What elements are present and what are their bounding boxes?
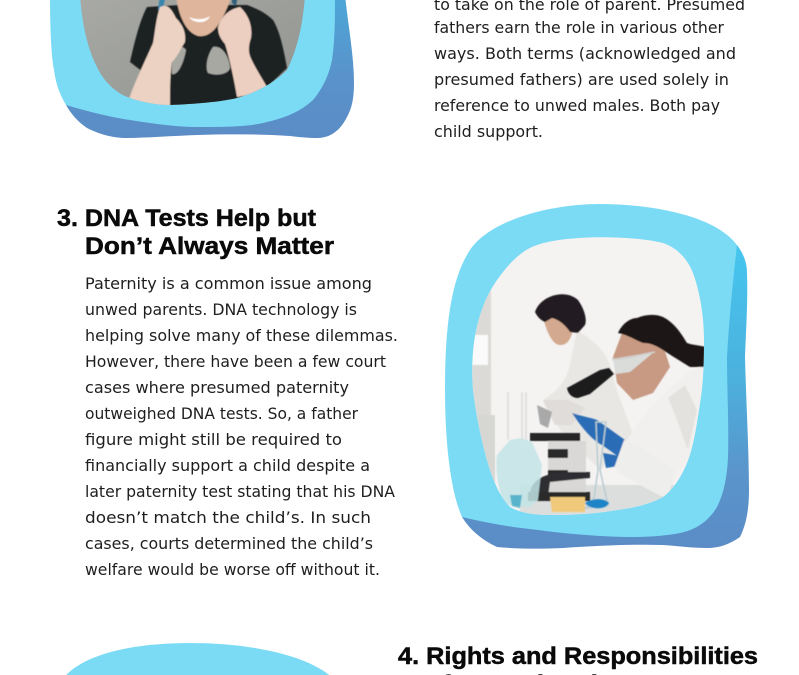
text block: DNA tests: welfare would be worse off without it.: [85, 560, 380, 579]
back scientist: [535, 294, 633, 470]
front scientist coat: [612, 315, 706, 497]
table: [520, 485, 675, 515]
text block: DNA tests: doesn’t match the child’s. In such: [85, 508, 371, 527]
text block: DNA tests: outweighed DNA tests. So, a father: [85, 404, 358, 423]
right arm and hand: [218, 7, 267, 97]
left lab shelf: [472, 290, 496, 484]
text block: DNA tests: However, there have been a few court: [85, 352, 386, 371]
heading: section 3: Don’t Always Matter: [85, 233, 334, 260]
text block: acknowledged and presumed fathers: child support.: [434, 122, 543, 141]
text block: acknowledged and presumed fathers: [434, 0, 745, 141]
image: man in black t-shirt in blue blob frame: [50, 0, 354, 138]
text block: DNA tests: unwed parents. DNA technology is: [85, 300, 357, 319]
text block: acknowledged and presumed fathers: fathers earn the role in various other: [434, 18, 724, 37]
woman's face and hair: [613, 333, 670, 400]
blob frame front shape: [445, 204, 737, 537]
microscope: [496, 368, 675, 512]
text block: DNA tests: cases, courts determined the child’s: [85, 534, 373, 553]
text block: DNA tests: figure might still be required to: [85, 430, 342, 449]
left arm and hand: [128, 6, 185, 110]
text block: DNA tests: [85, 274, 398, 579]
text block: DNA tests: cases where presumed paternity: [85, 378, 349, 397]
face: [176, 0, 232, 36]
flasks: [496, 438, 542, 507]
image: lab scientists in blue blob frame: [445, 204, 749, 549]
heading: section 3: 3. DNA Tests Help but: [57, 205, 316, 232]
text block: DNA tests: helping solve many of these dilemmas.: [85, 326, 398, 345]
heading: section 3: [57, 205, 334, 260]
heading: section 4: 4. Rights and Responsibilities: [398, 643, 758, 670]
text block: DNA tests: financially support a child despite a: [85, 456, 370, 475]
photo: man: [80, 0, 305, 105]
headphones: [172, 47, 186, 74]
blue glove: [572, 413, 625, 458]
text block: acknowledged and presumed fathers: reference to unwed males. Both pay: [434, 96, 720, 115]
text block: DNA tests: Paternity is a common issue among: [85, 274, 372, 293]
photo: scientists with microscope: [465, 230, 710, 520]
image: partial blob frame for section 4: [62, 643, 335, 675]
text block: acknowledged and presumed fathers: presumed fathers) are used solely in: [434, 70, 729, 89]
text block: acknowledged and presumed fathers: ways. Both terms (acknowledged and: [434, 44, 736, 63]
blob frame shadow shape: [60, 0, 354, 138]
text block: DNA tests: later paternity test stating that his DNA: [85, 482, 395, 501]
blob frame shadow shape: [462, 245, 749, 549]
blob frame front shape: [50, 0, 335, 127]
t-shirt: [130, 5, 287, 110]
